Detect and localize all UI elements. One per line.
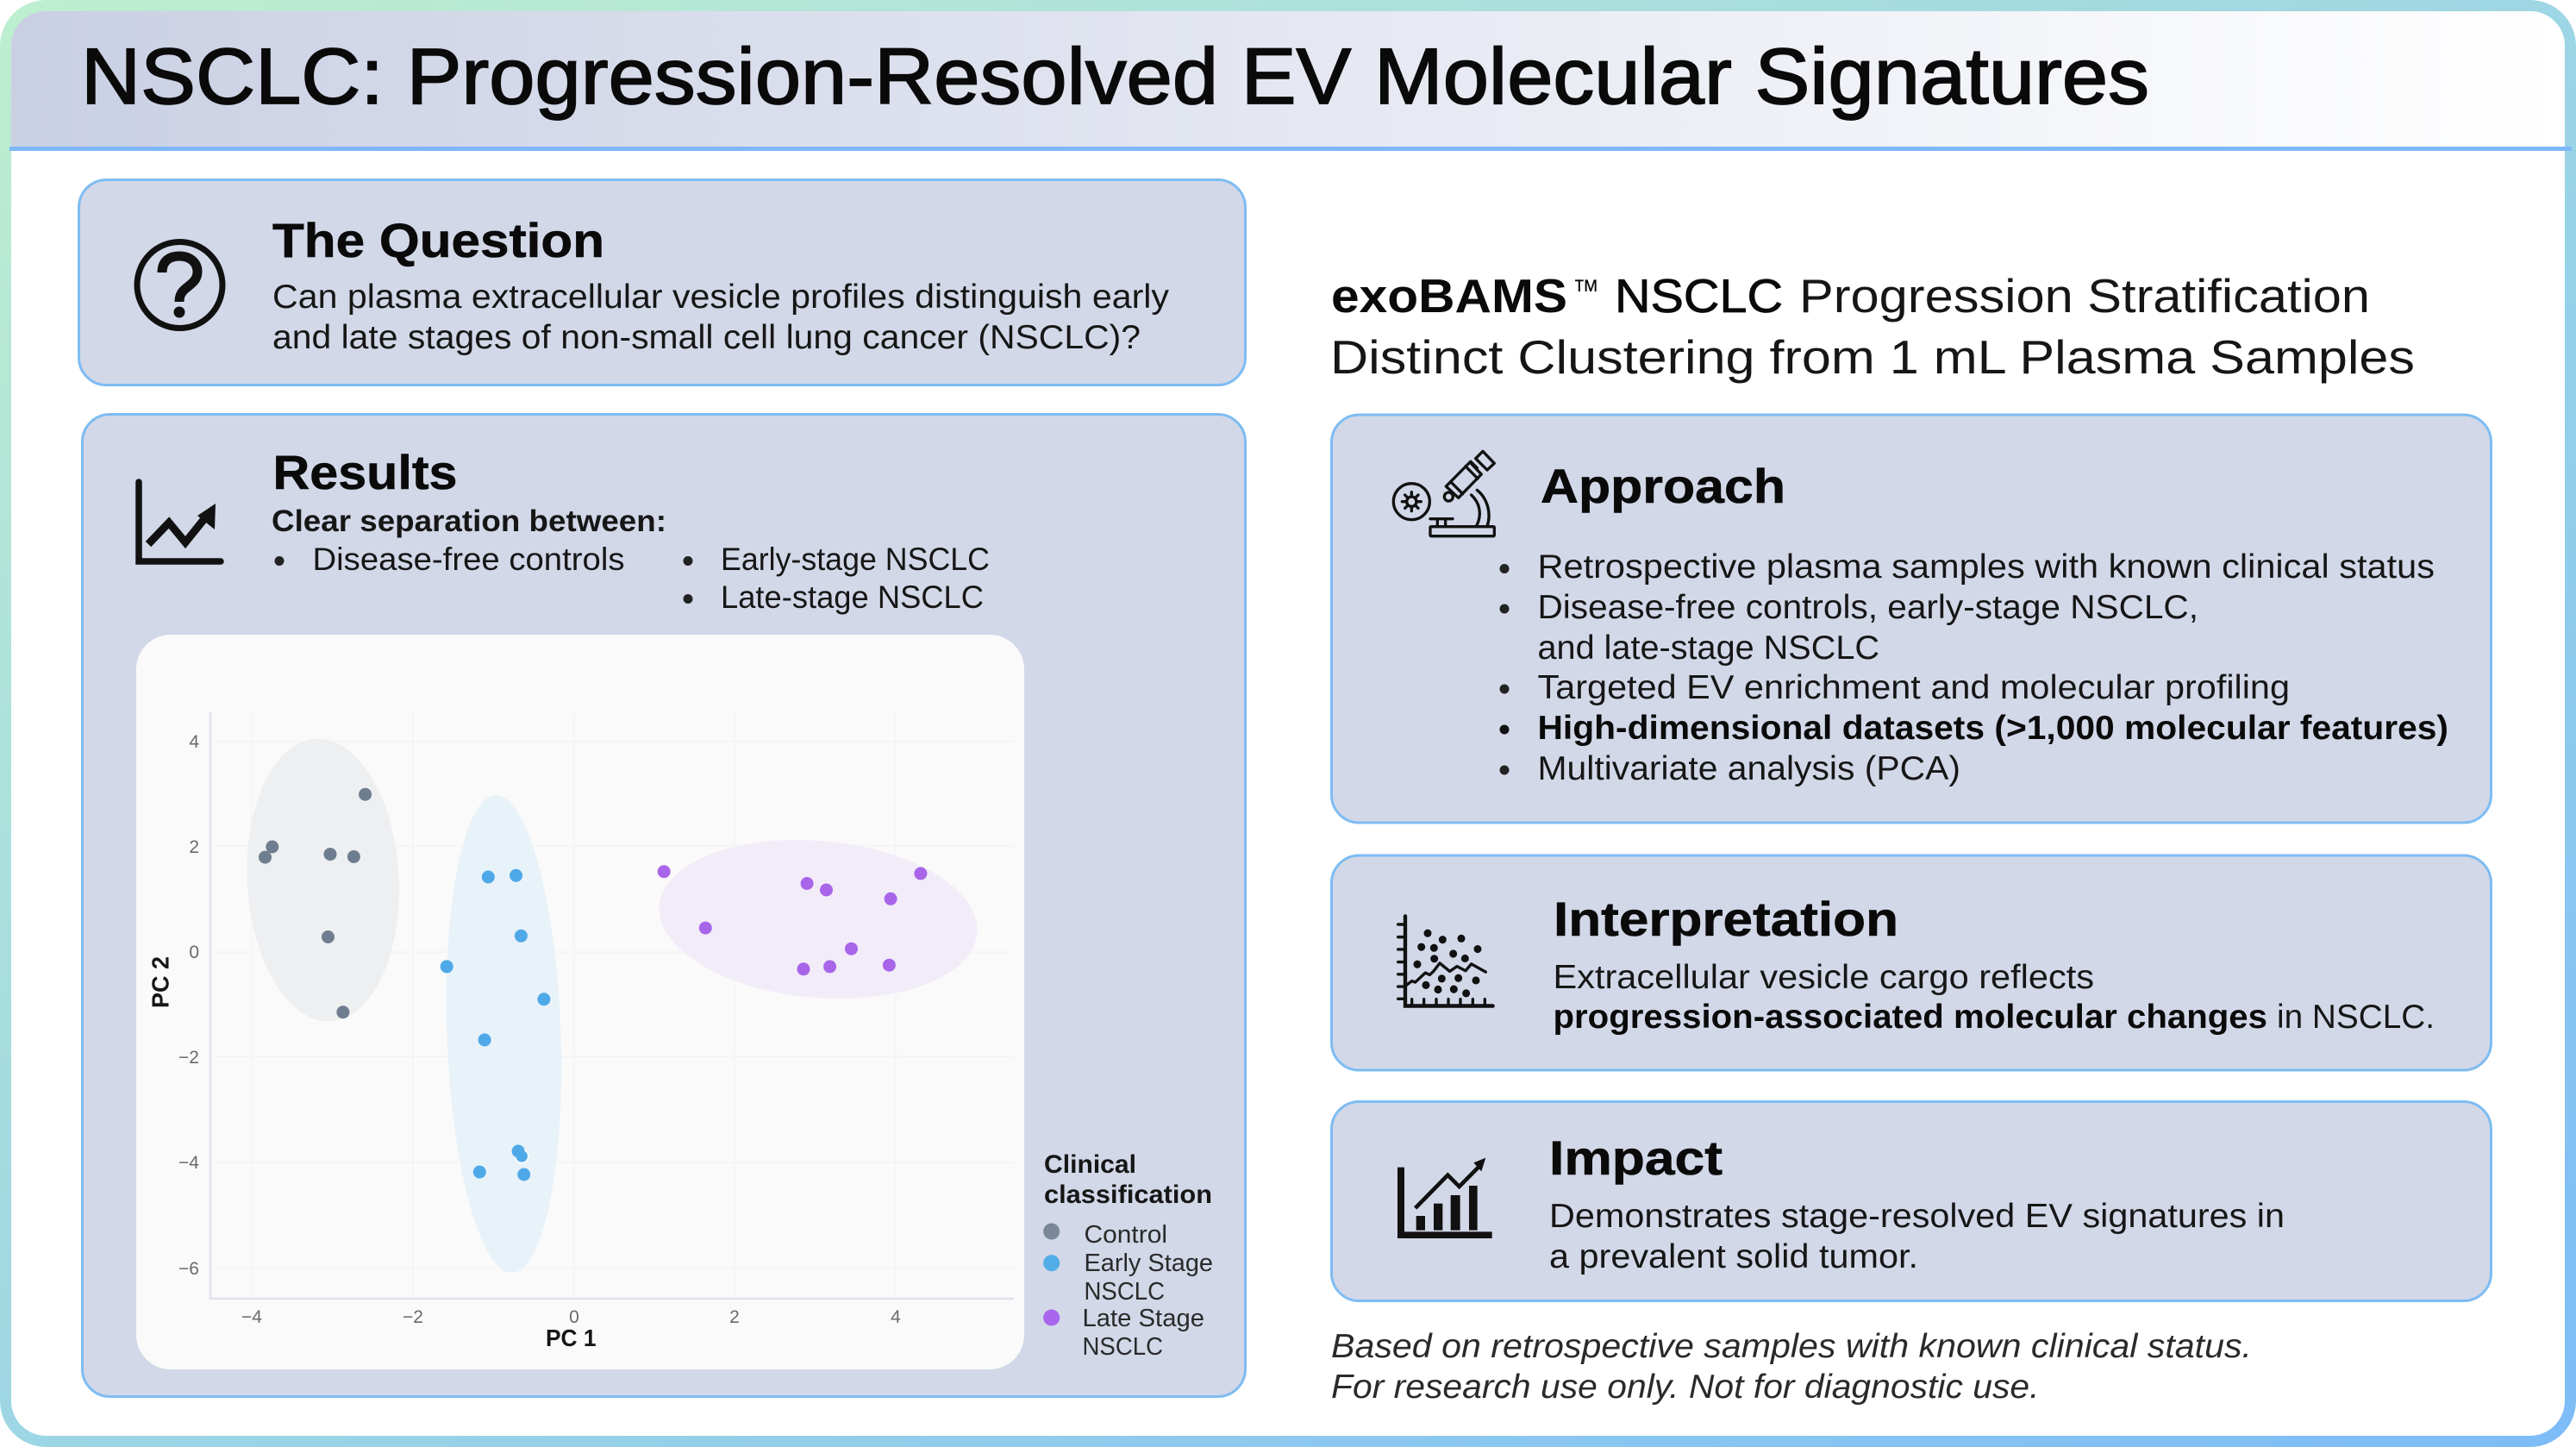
ellipse: late stage cluster — [653, 827, 984, 1012]
panel: impact — [1331, 1102, 2492, 1300]
question text — [272, 279, 1170, 356]
legend: clinical classification — [1043, 1150, 1213, 1361]
approach list: Disease-free controls, early-stage NSCLC, — [1538, 589, 2198, 626]
question text: and late stages of non-small cell lung cancer (NSCLC)? — [272, 319, 1141, 356]
approach list: Multivariate analysis (PCA) — [1538, 750, 1960, 787]
separation summary: Late-stage NSCLC — [721, 579, 984, 615]
ellipse: early stage cluster — [439, 793, 569, 1275]
separation summary: Clear separation between: — [272, 504, 666, 538]
y axis tick labels: −2 — [178, 1048, 199, 1068]
impact text: a prevalent solid tumor. — [1549, 1238, 1918, 1275]
subtitle: Progression Stratification — [1799, 269, 2370, 323]
legend: clinical classification: Early Stage — [1085, 1250, 1213, 1277]
chart: PCA scatter plot — [136, 635, 1024, 1369]
icon: microscope — [1393, 451, 1494, 536]
y axis tick labels — [178, 732, 199, 1279]
points: control — [259, 788, 372, 1018]
icon: bar chart with arrow — [1397, 1158, 1492, 1238]
x axis tick labels: −4 — [241, 1307, 262, 1327]
panel: the question — [79, 179, 1245, 385]
interpretation text: progression-associated molecular changes — [1554, 999, 2267, 1036]
y axis tick labels: 4 — [189, 732, 199, 752]
heading: interpretation: Interpretation — [1554, 892, 1898, 946]
x axis tick labels: −2 — [403, 1307, 423, 1327]
approach list: Targeted EV enrichment and molecular profiling — [1538, 669, 2290, 706]
approach list: and late-stage NSCLC — [1538, 630, 1879, 667]
legend: clinical classification: classification — [1044, 1181, 1212, 1209]
y axis tick labels: −4 — [178, 1153, 199, 1173]
panel: results — [83, 414, 1245, 1397]
subtitle: ™ — [1572, 272, 1599, 308]
points: early stage NSCLC — [441, 869, 550, 1181]
interpretation text — [1554, 959, 2435, 1036]
x axis tick labels: 4 — [891, 1307, 901, 1327]
subtitle: exoBAMS — [1331, 269, 1567, 323]
icon: question mark — [137, 241, 222, 328]
legend: clinical classification: Clinical — [1044, 1150, 1136, 1179]
header band — [9, 11, 2572, 151]
y axis tick labels: 0 — [189, 943, 199, 962]
footnote — [1331, 1328, 2252, 1406]
footnote: For research use only. Not for diagnostic use. — [1331, 1369, 2040, 1406]
points: late stage NSCLC — [658, 865, 927, 975]
interpretation text: in NSCLC. — [2277, 999, 2435, 1036]
x axis tick labels: 2 — [729, 1307, 740, 1327]
icon: trend chart — [139, 482, 221, 561]
y axis tick labels: −6 — [178, 1259, 199, 1279]
panel: interpretation — [1331, 855, 2492, 1070]
legend: clinical classification: NSCLC — [1083, 1333, 1163, 1361]
legend: clinical classification: Late Stage — [1083, 1305, 1204, 1332]
heading: approach: Approach — [1541, 459, 1785, 513]
x axis label: PC 1 — [546, 1325, 597, 1351]
approach list — [1500, 548, 2448, 787]
separation summary — [272, 504, 990, 615]
approach list: High-dimensional datasets (>1,000 molecular features) — [1538, 710, 2448, 747]
interpretation text: Extracellular vesicle cargo reflects — [1554, 959, 2094, 996]
title: NSCLC: Progression-Resolved EV Molecular Signatures — [81, 33, 2149, 121]
y axis label: PC 2 — [147, 956, 174, 1008]
icon: scatter with trend — [1398, 916, 1493, 1006]
ellipse: control cluster — [240, 735, 406, 1025]
heading: impact: Impact — [1549, 1131, 1723, 1185]
legend: clinical classification: NSCLC — [1085, 1278, 1165, 1306]
subtitle: NSCLC — [1615, 269, 1783, 323]
impact text — [1549, 1198, 2285, 1275]
legend: clinical classification: Control — [1085, 1221, 1167, 1249]
question text: Can plasma extracellular vesicle profiles distinguish early — [272, 279, 1170, 316]
heading: the question: The Question — [272, 213, 604, 267]
footnote: Based on retrospective samples with known clinical status. — [1331, 1328, 2252, 1365]
subtitle: Distinct Clustering from 1 mL Plasma Samples — [1330, 330, 2415, 384]
approach list: Retrospective plasma samples with known clinical status — [1538, 548, 2435, 586]
separation summary: Early-stage NSCLC — [721, 542, 990, 577]
subtitle — [1330, 269, 2415, 384]
heading: results: Results — [272, 445, 457, 499]
impact text: Demonstrates stage-resolved EV signatures in — [1549, 1198, 2285, 1235]
y axis tick labels: 2 — [189, 837, 199, 857]
x axis tick labels — [241, 1307, 901, 1327]
x axis tick labels: 0 — [569, 1307, 579, 1327]
panel: approach — [1331, 415, 2492, 823]
separation summary: Disease-free controls — [312, 542, 624, 577]
